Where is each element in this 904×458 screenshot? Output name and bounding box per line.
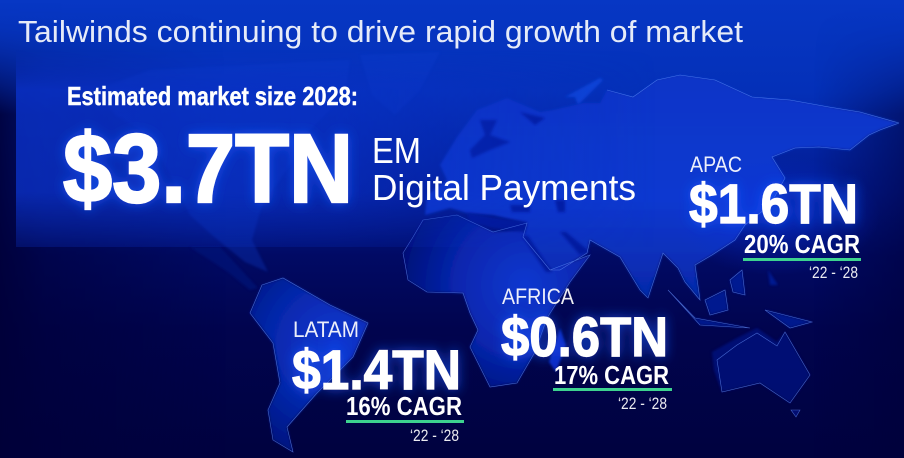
region: latam: LATAM <box>293 317 359 342</box>
region: latam <box>292 317 464 445</box>
region: latam: ‘22 - ‘28 <box>410 426 459 445</box>
novaya zemlya <box>565 78 603 105</box>
australia <box>712 328 810 403</box>
region: latam: $1.4TN <box>292 338 461 401</box>
total market value: $3.7TN <box>63 114 353 223</box>
coast outlines <box>250 75 899 452</box>
region: africa <box>501 284 672 413</box>
africa <box>403 215 590 387</box>
south america <box>250 278 368 452</box>
madagascar <box>549 328 566 372</box>
em digital payments label <box>372 130 636 208</box>
tasmania <box>791 410 800 417</box>
panel heading: Estimated market size 2028: <box>67 81 358 111</box>
eurasia <box>425 75 899 300</box>
region: latam: 16% CAGR <box>346 391 462 421</box>
region: africa: AFRICA <box>502 284 574 309</box>
glow spots <box>670 155 880 275</box>
region: apac: APAC <box>690 152 742 177</box>
region: africa: 17% CAGR <box>554 360 669 390</box>
region: africa: ‘22 - ‘28 <box>618 394 667 413</box>
region: apac: 20% CAGR <box>744 229 860 259</box>
southeast asia islands <box>668 270 812 328</box>
region: apac <box>689 152 861 282</box>
world map <box>95 52 899 452</box>
central america and caribbean <box>190 247 258 290</box>
region: africa: $0.6TN <box>501 305 668 368</box>
title: Tailwinds continuing to drive rapid growth of market <box>18 14 743 49</box>
region: apac: $1.6TN <box>689 172 858 235</box>
em digital payments label: Digital Payments <box>372 167 636 208</box>
north america <box>95 60 350 272</box>
em digital payments label: EM <box>372 130 421 171</box>
greenland <box>360 52 440 115</box>
region: apac: ‘22 - ‘28 <box>809 263 858 282</box>
inland seas <box>467 112 590 272</box>
